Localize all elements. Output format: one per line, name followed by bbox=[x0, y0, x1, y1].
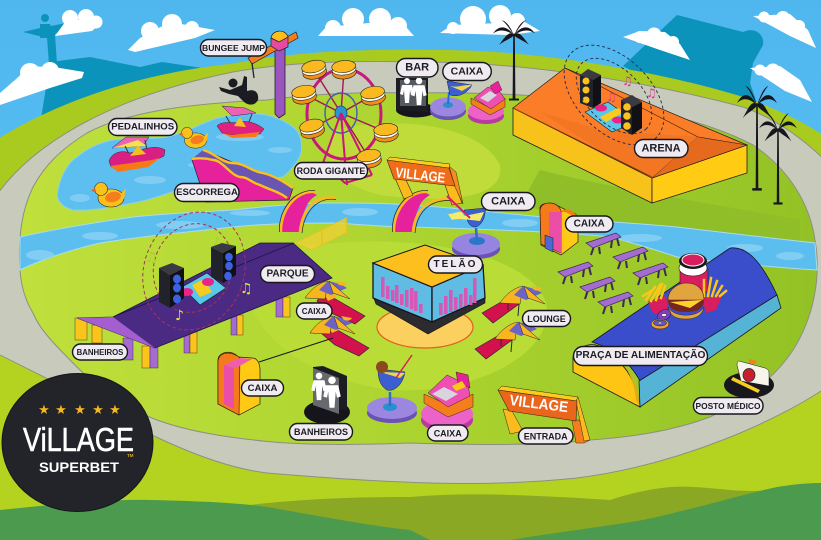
label: entrada bbox=[518, 428, 573, 444]
label: roda gigante: RODA GIGANTE bbox=[297, 166, 365, 176]
cocktail centre bbox=[447, 196, 500, 259]
speaker parque left bbox=[159, 263, 184, 308]
label: roda gigante bbox=[294, 162, 368, 179]
label: pedalinhos bbox=[108, 118, 177, 136]
icon: bungee jumper bbox=[219, 76, 258, 105]
label: parque: PARQUE bbox=[266, 269, 309, 280]
music notes: ♫ bbox=[606, 90, 617, 104]
label: escorrega bbox=[174, 184, 239, 202]
lake bbox=[57, 114, 302, 210]
rating stars: ★ bbox=[109, 403, 121, 418]
palm tree right 1 bbox=[737, 86, 777, 191]
kiosk right bbox=[540, 203, 578, 255]
label: arena: ARENA bbox=[641, 143, 681, 155]
arch centre bbox=[392, 190, 458, 233]
label: bar: BAR bbox=[405, 62, 429, 74]
cocktail top bbox=[430, 81, 472, 120]
label: caixa top bbox=[443, 62, 491, 80]
ferris wheel bbox=[291, 58, 399, 185]
road bbox=[0, 61, 821, 483]
food: fries left bbox=[643, 284, 668, 316]
label: caixa small: CAIXA bbox=[302, 307, 327, 316]
picnic benches bbox=[558, 233, 668, 314]
logo badge bbox=[2, 374, 153, 512]
label: lounge: LOUNGE bbox=[527, 314, 566, 324]
telão left screen bbox=[373, 263, 432, 322]
music notes bbox=[606, 74, 657, 104]
gate: entrada: VILLAGE bbox=[509, 392, 569, 416]
lounge chairs right bbox=[475, 286, 545, 359]
icon: rubber duck large bbox=[91, 182, 126, 207]
volleyball net bbox=[295, 217, 348, 250]
pedal boat left bbox=[109, 137, 165, 172]
music notes: ♫ bbox=[646, 86, 657, 100]
label: banheiros: BANHEIROS bbox=[294, 427, 348, 437]
music notes parque: ♫ bbox=[240, 281, 253, 297]
mountain right bbox=[623, 15, 763, 112]
gate: village top bbox=[387, 157, 463, 205]
music notes: ♫ bbox=[622, 74, 633, 88]
label: bungee jump: BUNGEE JUMP bbox=[202, 43, 265, 53]
gate: entrada bbox=[498, 386, 590, 443]
lounge chairs left bbox=[259, 281, 369, 362]
label: caixa top: CAIXA bbox=[451, 66, 484, 78]
label: caixa bottom bbox=[428, 425, 468, 441]
label: caixa lower left: CAIXA bbox=[248, 383, 277, 394]
bungee jump tower bbox=[219, 31, 298, 118]
bottom hills bbox=[0, 483, 821, 540]
music notes parque: ♪ bbox=[213, 235, 220, 248]
label: caixa small bbox=[296, 303, 332, 319]
sound waves bbox=[545, 26, 683, 164]
music notes parque: ♪ bbox=[175, 308, 184, 324]
river bbox=[20, 203, 817, 270]
water slide bbox=[192, 150, 293, 202]
label: lounge bbox=[522, 310, 570, 326]
banheiros sign bbox=[304, 366, 350, 424]
sound waves parque bbox=[126, 198, 262, 344]
food: drink cup bbox=[679, 253, 708, 292]
cash register bottom bbox=[421, 372, 473, 432]
praça de alimentação building bbox=[573, 248, 781, 407]
label: pedalinhos: PEDALINHOS bbox=[111, 122, 175, 133]
music notes parque: ♫ bbox=[145, 250, 158, 266]
food: donuts bbox=[651, 307, 673, 329]
label: escorrega: ESCORREGA bbox=[176, 187, 238, 198]
label: telão: TELÃO bbox=[434, 257, 477, 270]
mountain left with Christ statue bbox=[23, 14, 216, 125]
label: banheiros left: BANHEIROS bbox=[77, 348, 123, 357]
speaker right bbox=[621, 95, 642, 135]
pedal boat right bbox=[217, 106, 264, 138]
cash register top bbox=[468, 81, 505, 124]
label: caixa bottom: CAIXA bbox=[434, 428, 462, 438]
parque stage bbox=[75, 198, 332, 368]
label: caixa right bbox=[566, 216, 613, 232]
food: burger bbox=[668, 283, 704, 319]
telão right screen bbox=[432, 265, 485, 322]
rating stars: ★ bbox=[38, 403, 50, 418]
dj booth parque bbox=[181, 273, 226, 305]
telão platform bbox=[373, 245, 485, 348]
label: entrada: ENTRADA bbox=[524, 431, 568, 441]
logo sub wordmark: SUPERBET bbox=[39, 460, 120, 475]
rating stars: ★ bbox=[55, 403, 67, 418]
kiosk lower left bbox=[218, 352, 260, 415]
equalizer bars bbox=[381, 277, 476, 315]
label: telão bbox=[428, 256, 482, 273]
arch left bbox=[279, 190, 336, 233]
label: posto médico: POSTO MÉDICO bbox=[696, 400, 761, 411]
label: arena bbox=[634, 140, 688, 158]
label: caixa centre: CAIXA bbox=[491, 196, 525, 208]
arena stage bbox=[513, 26, 747, 203]
music notes parque bbox=[145, 235, 253, 324]
label: parque bbox=[260, 266, 314, 282]
gate: village top: VILLAGE bbox=[395, 164, 446, 186]
logo wordmark: ViLLAGE bbox=[23, 421, 134, 458]
lawn light patches bbox=[247, 123, 800, 390]
label: banheiros left bbox=[72, 344, 128, 360]
lawn bbox=[20, 93, 817, 445]
label: praça de alimentação: PRAÇA DE ALIMENTAÇÃO bbox=[576, 348, 705, 361]
label: bar bbox=[396, 58, 438, 77]
label: caixa right: CAIXA bbox=[574, 219, 605, 230]
speaker parque right bbox=[211, 243, 236, 283]
clouds bbox=[0, 5, 816, 105]
trademark: TM bbox=[127, 453, 134, 458]
label: posto médico bbox=[694, 398, 763, 414]
bar sign bbox=[396, 78, 436, 118]
speaker left bbox=[580, 69, 601, 108]
label: bungee jump bbox=[200, 40, 266, 56]
label: banheiros bbox=[290, 424, 352, 440]
cocktail bottom bbox=[367, 355, 417, 423]
icon: rubber duck small bbox=[179, 127, 208, 148]
rating stars bbox=[38, 403, 121, 418]
label: caixa centre bbox=[482, 192, 535, 210]
label: praça de alimentação bbox=[574, 346, 708, 366]
posto médico bbox=[724, 359, 774, 398]
palm tree top bbox=[493, 20, 535, 100]
rating stars: ★ bbox=[74, 403, 86, 418]
label: caixa lower left bbox=[242, 380, 284, 396]
rating stars: ★ bbox=[92, 403, 104, 418]
dj booth bbox=[585, 102, 636, 132]
food: fries right bbox=[702, 278, 726, 313]
palm tree right 2 bbox=[759, 113, 797, 205]
